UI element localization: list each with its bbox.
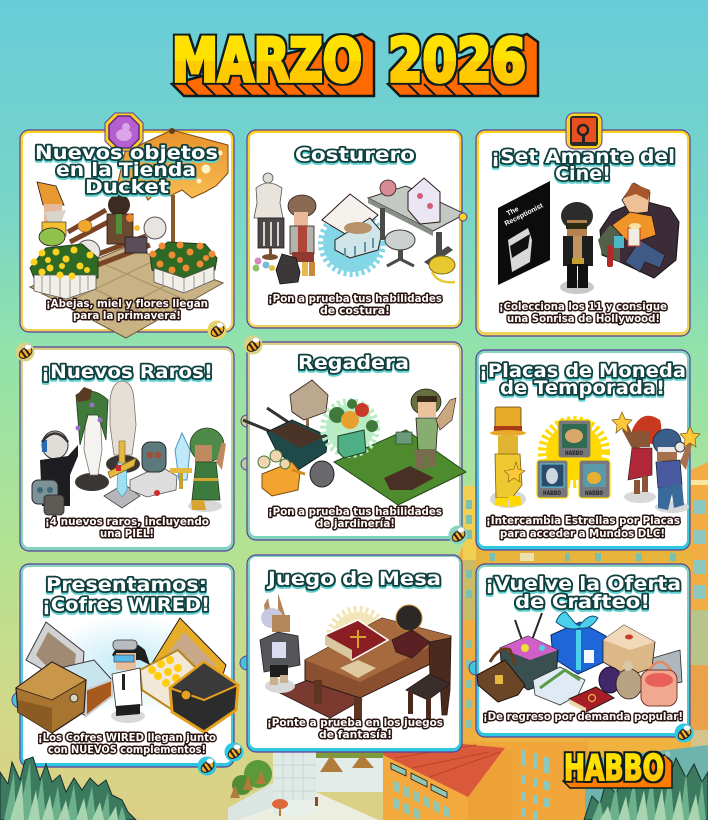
caption: ¡4 nuevos raros, incluyendo (45, 516, 209, 528)
caption (499, 301, 667, 325)
sewing box (322, 194, 382, 258)
badge: duck (579, 460, 610, 498)
caption (38, 732, 216, 756)
TV (500, 613, 558, 690)
panel interior (23, 133, 231, 329)
planter: yellow flowers (30, 244, 98, 300)
purple bag (599, 667, 621, 693)
badge: palette: HABBO (565, 450, 583, 457)
heading: ¡Vuelve la Oferta (485, 573, 681, 595)
panel frame (247, 555, 462, 752)
illustration: cinema (498, 181, 679, 294)
honey (78, 220, 92, 232)
illustration: badges (490, 407, 700, 513)
illustration: garden bench, umbrella and planters (30, 128, 228, 338)
caption (46, 298, 208, 322)
heading: Costurero (295, 144, 415, 166)
man with star (653, 426, 700, 513)
connector bump (240, 656, 254, 670)
panel frame (20, 564, 234, 767)
caption (268, 293, 442, 317)
caption: una Sonrisa de Hollywood! (507, 313, 660, 325)
starburst (329, 609, 387, 667)
logo extrusion (563, 755, 672, 788)
cat (276, 254, 300, 284)
measuring tape (429, 256, 455, 282)
caption: con NUEVOS complementos! (48, 744, 206, 756)
pale mannequin (110, 381, 136, 455)
caption: ¡Abejas, miel y flores llegan (46, 298, 208, 310)
vine mannequin (76, 387, 108, 475)
caption: ¡Intercambia Estrellas por Placas (486, 515, 680, 527)
birdhouse (290, 380, 328, 434)
caption: de jardinería! (316, 518, 395, 530)
table (305, 618, 451, 720)
heading: de Crafteo! (515, 591, 650, 613)
panel interior (250, 557, 459, 748)
caption (268, 506, 442, 530)
heading: Ducket (85, 176, 169, 198)
stool (385, 230, 415, 266)
seated character (107, 194, 147, 253)
glow (43, 615, 213, 715)
poster: The (506, 206, 520, 218)
mannequin bases (75, 455, 140, 491)
pillow book (533, 667, 585, 705)
connector bumps (241, 415, 253, 470)
white box robot (130, 442, 177, 497)
badge: film reel (566, 113, 602, 149)
chair (406, 638, 451, 722)
orange watering can (258, 450, 305, 496)
registered mark: ® (665, 751, 671, 759)
blue sword (170, 433, 192, 489)
sack (616, 661, 642, 699)
cream box (603, 625, 655, 676)
heading: Cine! (555, 163, 611, 185)
panel frame (20, 347, 234, 551)
small box (392, 630, 430, 658)
character in goggles (111, 640, 150, 723)
sphere (396, 605, 422, 631)
gift box blue (551, 612, 606, 674)
icon: bee bottom (448, 526, 468, 544)
title extrusion: MARZO (172, 34, 374, 96)
shadow (560, 280, 594, 294)
heading (485, 573, 681, 613)
grass: left cluster (0, 757, 136, 820)
book (325, 620, 388, 660)
heading (35, 142, 218, 198)
panel interior (250, 345, 459, 536)
mannequin (254, 173, 284, 260)
icon: bee right (224, 742, 244, 762)
gnome (37, 182, 66, 246)
illustration: sewing room (252, 173, 465, 284)
badge: ducket purple octagon (105, 113, 143, 151)
umbrella (118, 128, 228, 257)
illustration: chests (16, 615, 238, 733)
badge: horse (537, 460, 568, 498)
caption: ¡Pon a prueba tus habilidades (268, 506, 442, 518)
flower burst (323, 401, 377, 455)
pin cushion (380, 180, 396, 196)
panel interior (479, 353, 687, 546)
grey shopping bag (646, 650, 682, 688)
panel interior (479, 133, 687, 332)
panel: Cofres WIRED (12, 564, 244, 776)
caption (486, 515, 680, 540)
heading: ¡Cofres WIRED! (42, 594, 210, 616)
heading: Juego de Mesa (266, 568, 441, 590)
floor (30, 246, 223, 338)
icon: bee (208, 320, 226, 340)
logo text: HABBO (564, 748, 664, 789)
illustration: board game (260, 593, 451, 722)
badge: palette (558, 420, 591, 458)
title: MARZO 2026 (172, 26, 538, 96)
brown bag (477, 649, 525, 702)
horned character (260, 593, 300, 693)
connector bump (12, 692, 28, 708)
dryad woman (188, 428, 226, 512)
heading (42, 574, 210, 616)
starburst (321, 212, 383, 274)
heading: ¡Set Amante del (491, 146, 675, 168)
heading (491, 146, 675, 185)
caption: para la primavera! (73, 310, 181, 322)
connector bump: Costurero right (459, 213, 467, 221)
heading: ¡Nuevos Raros! (41, 361, 213, 383)
black-gold chest (170, 662, 238, 732)
panel frame (20, 130, 234, 332)
panel: Nuevos Raros (16, 342, 234, 551)
icon: bee (16, 342, 34, 362)
character (288, 195, 316, 276)
caption (267, 717, 443, 741)
pink backpack (641, 662, 677, 706)
garden patch (334, 430, 466, 505)
caption (45, 516, 209, 540)
seated character (612, 183, 665, 272)
robot cat (32, 480, 64, 515)
heading: ¡Placas de Moneda (479, 360, 686, 382)
title extrusion: 2026 (388, 34, 538, 96)
connector bump (469, 661, 483, 675)
panel: Costurero (247, 130, 465, 328)
rug (278, 675, 362, 718)
panel: Oferta de Crafteo (469, 564, 694, 742)
headphones figure (40, 431, 78, 506)
heading: de Temporada! (500, 377, 665, 399)
caption: de fantasía! (319, 729, 392, 741)
woman with star (612, 412, 661, 503)
badge: horse: HABBO (543, 490, 561, 497)
panel: Juego de Mesa (240, 555, 462, 752)
caption: ¡De regreso por demanda popular! (483, 711, 683, 723)
silver chest (26, 622, 112, 716)
illustration: crafted items (477, 612, 682, 712)
illustration: gardening (243, 380, 466, 505)
buttons (252, 258, 275, 272)
grass: right cluster (584, 758, 708, 820)
caption: ¡Los Cofres WIRED llegan junto (38, 732, 216, 744)
poster (498, 181, 550, 285)
caption: de costura! (320, 305, 390, 317)
logo: HABBO (563, 748, 672, 789)
panel frame (247, 342, 462, 540)
heading: Presentamos: (46, 574, 207, 596)
character: sunglasses (561, 202, 593, 288)
title text: MARZO: MARZO (172, 26, 362, 96)
starburst (542, 420, 606, 484)
wooden chest (16, 662, 86, 733)
panel frame (476, 130, 690, 336)
illustration: rares (32, 381, 226, 515)
panel frame (476, 564, 690, 737)
icon: bee (674, 724, 694, 742)
caption: ¡Colecciona los 11 y consigue (499, 301, 667, 313)
panel: Regadera (241, 336, 468, 544)
heading: Nuevos objetos (35, 142, 218, 164)
heading (479, 360, 686, 399)
panel: Set Amante del Cine (476, 113, 690, 336)
panel interior (23, 350, 231, 547)
icon: bee top (244, 336, 262, 354)
icon: bee bottom (198, 756, 216, 776)
caption: para acceder a Mundos DLC! (500, 528, 665, 540)
panel: Tienda Ducket (20, 113, 234, 340)
gold figure (490, 407, 526, 508)
planter: orange flowers (150, 242, 217, 293)
sewing machine (408, 178, 440, 224)
sewing table (368, 186, 465, 266)
panel interior (23, 567, 231, 763)
cola (607, 245, 613, 267)
soil (384, 466, 434, 490)
crystal sword pedestal (104, 441, 140, 508)
panel interior (479, 567, 687, 733)
red book (569, 687, 614, 712)
badge: duck: HABBO (585, 490, 603, 497)
panel frame (476, 350, 690, 550)
caption: una PIEL! (100, 528, 154, 540)
title text: 2026: 2026 (388, 26, 526, 96)
panel: Placas de Moneda de Temporada (476, 350, 700, 550)
panel interior (250, 133, 459, 325)
poster: Receptionist (504, 202, 545, 228)
gold chest (140, 618, 226, 715)
wheelbarrow (243, 408, 334, 487)
heading: Regadera (298, 352, 409, 374)
caption: ¡Pon a prueba tus habilidades (268, 293, 442, 305)
green watering can (329, 399, 378, 458)
panel frame (247, 130, 462, 328)
armchair (598, 200, 679, 278)
gardener (396, 389, 456, 470)
bench (68, 210, 166, 267)
caption: ¡Ponte a prueba en los juegos (267, 717, 443, 729)
heading: en la Tienda (56, 159, 196, 181)
background: isometric city (228, 462, 708, 820)
